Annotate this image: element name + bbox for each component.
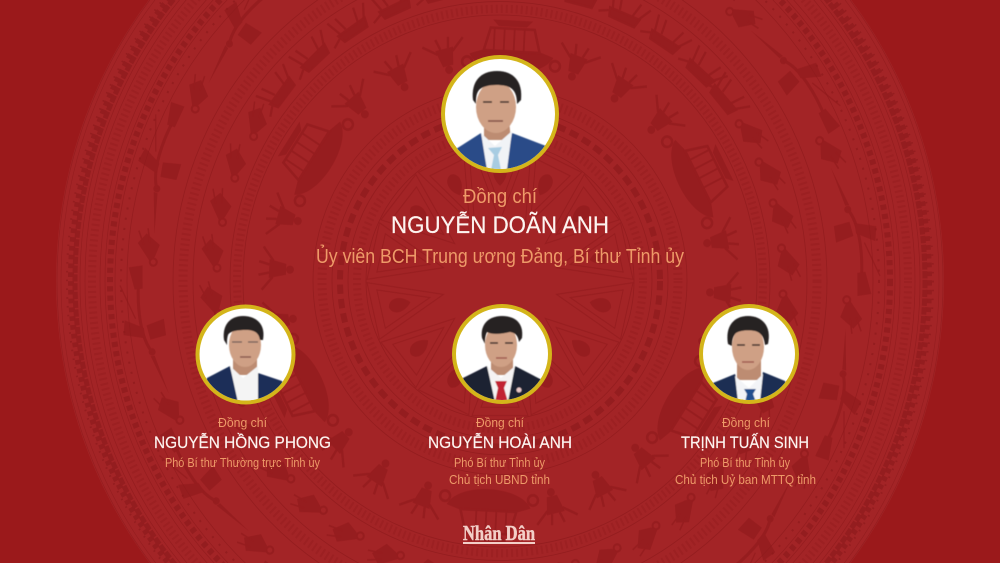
heading: main official: Đồng chí (463, 186, 537, 208)
portrait: Nguyễn Hoài Anh (452, 304, 552, 405)
portrait: Trịnh Tuấn Sinh (699, 304, 799, 405)
text: Nguyễn Hoài Anh (428, 415, 572, 487)
text: Trịnh Tuấn Sinh (675, 415, 816, 487)
text: Nguyễn Hồng Phong: Phó Bí thư Thường trực Tỉnh ủy (165, 456, 321, 470)
text: Trịnh Tuấn Sinh: Phó Bí thư Tỉnh ủy (700, 456, 791, 470)
text: Trịnh Tuấn Sinh: TRỊNH TUẤN SINH (681, 433, 809, 452)
portrait: Nguyễn Doãn Anh (441, 55, 559, 175)
text: Nguyễn Hoài Anh: Đồng chí (476, 415, 524, 430)
heading: main official (316, 186, 684, 268)
text: Nguyễn Hồng Phong (154, 415, 331, 470)
text: Nguyễn Hoài Anh: Chủ tịch UBND tỉnh (449, 473, 550, 487)
text: Nguyễn Hồng Phong: Đồng chí (218, 415, 267, 430)
text: Nguyễn Hồng Phong: NGUYỄN HỒNG PHONG (154, 433, 331, 452)
logo: Nhân Dân: Nhân Dân (463, 521, 535, 545)
text: Nguyễn Hoài Anh: NGUYỄN HOÀI ANH (428, 433, 572, 452)
text: Nguyễn Hoài Anh: Phó Bí thư Tỉnh ủy (454, 456, 546, 470)
text: Trịnh Tuấn Sinh: Chủ tịch Uỷ ban MTTQ tỉnh (675, 473, 816, 487)
text: Trịnh Tuấn Sinh: Đồng chí (722, 415, 770, 430)
portrait: Nguyễn Hồng Phong (196, 304, 296, 405)
heading: main official: NGUYỄN DOÃN ANH (391, 210, 609, 239)
heading: main official: Ủy viên BCH Trung ương Đảng, Bí thư Tỉnh ủy (316, 244, 684, 268)
